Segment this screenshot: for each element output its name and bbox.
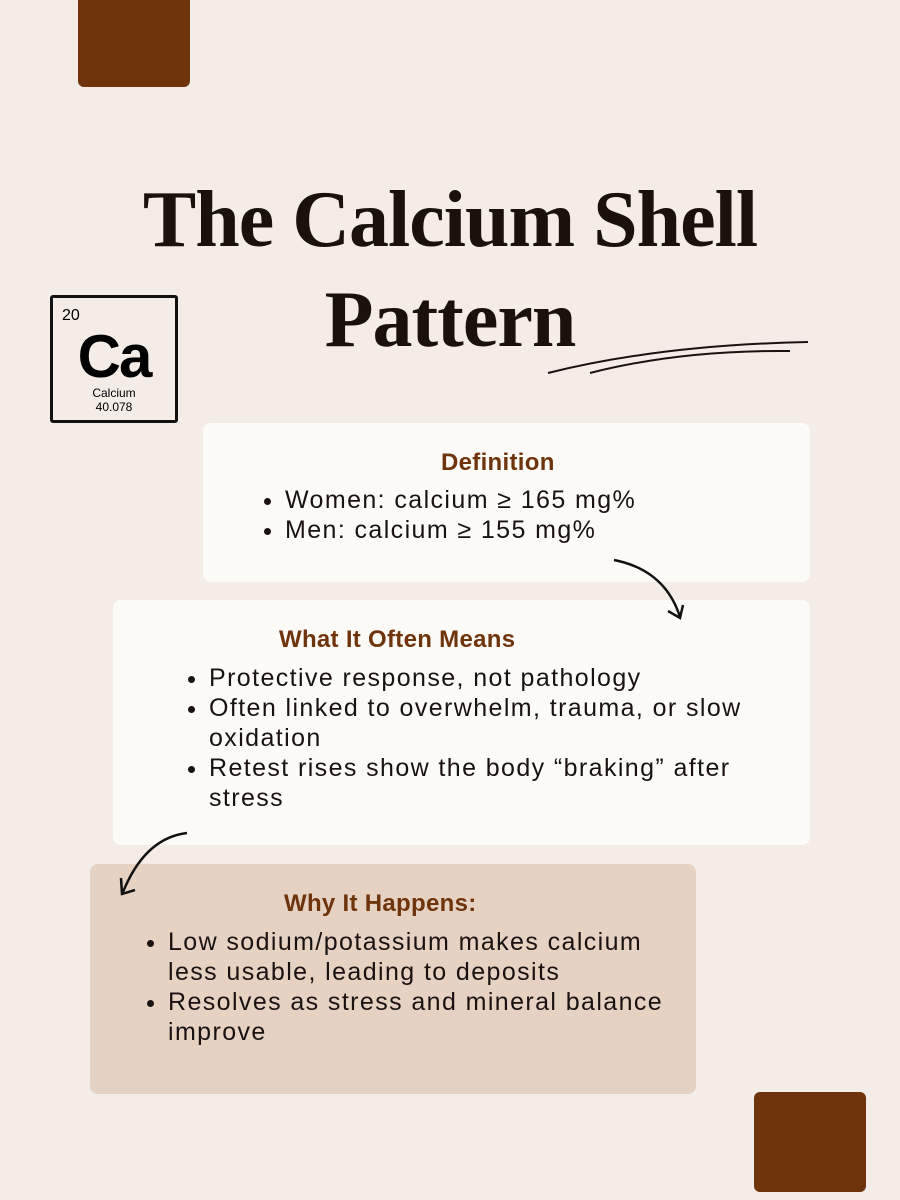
panel: what it often means: Retest rises show the body “braking” after bbox=[209, 754, 731, 782]
panel: why it happens bbox=[90, 864, 696, 1094]
decorative square top bbox=[78, 0, 190, 87]
panel: why it happens: less usable, leading to deposits bbox=[168, 958, 560, 986]
icon: calcium element tile: 20 bbox=[62, 307, 80, 324]
panel: why it happens: improve bbox=[168, 1018, 267, 1046]
icon: calcium element tile: Ca bbox=[78, 323, 150, 390]
decorative square bottom bbox=[754, 1092, 866, 1192]
panel: why it happens: Why It Happens: bbox=[284, 890, 477, 917]
panel: why it happens: Resolves as stress and mineral balance bbox=[168, 988, 663, 1016]
panel: what it often means: stress bbox=[209, 784, 284, 812]
icon: calcium element tile bbox=[50, 295, 178, 423]
icon: calcium element tile: 40.078 bbox=[96, 400, 132, 414]
arrow: meaning to why bbox=[120, 832, 188, 896]
panel: what it often means: Protective response, not pathology bbox=[209, 664, 642, 692]
panel: what it often means: oxidation bbox=[209, 724, 322, 752]
panel: what it often means: What It Often Means bbox=[279, 626, 515, 653]
title: The Calcium Shell bbox=[143, 176, 757, 264]
panel: definition: Definition bbox=[441, 449, 555, 476]
arrow: definition to meaning bbox=[614, 558, 684, 620]
panel: what it often means bbox=[113, 600, 810, 845]
panel: definition bbox=[203, 423, 810, 582]
panel: definition: Men: calcium ≥ 155 mg% bbox=[285, 516, 596, 544]
panel: what it often means: Often linked to overwhelm, trauma, or slow bbox=[209, 694, 742, 722]
title bbox=[143, 176, 757, 364]
panel: why it happens: Low sodium/potassium makes calcium bbox=[168, 928, 642, 956]
panel: definition: Women: calcium ≥ 165 mg% bbox=[285, 486, 636, 514]
title underline swoosh bbox=[548, 341, 808, 374]
icon: calcium element tile: Calcium bbox=[92, 386, 136, 400]
title: Pattern bbox=[325, 276, 575, 364]
